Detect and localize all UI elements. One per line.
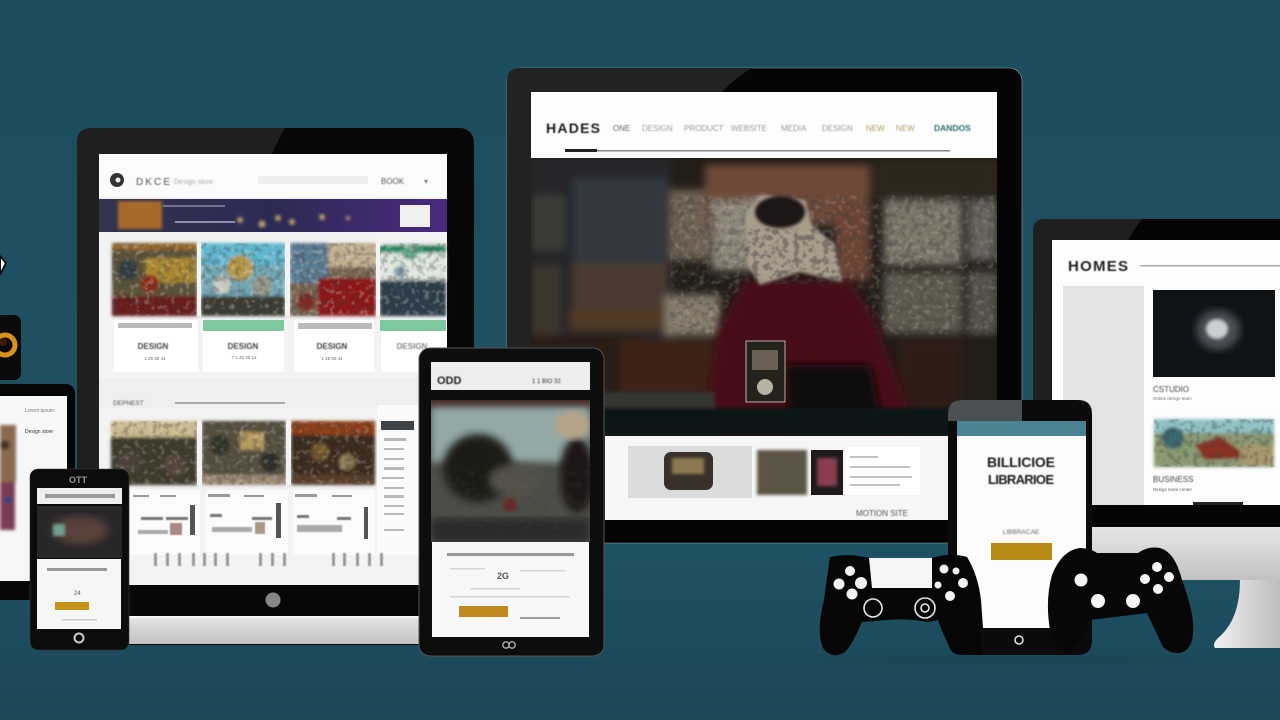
right phone heading: LIBRARIOE <box>988 472 1054 487</box>
far-left tablet text: Lorem ipsum <box>25 408 54 414</box>
left tablet header: ▾ <box>424 177 428 186</box>
left tablet cards row 1: DESIGN <box>397 342 428 351</box>
controller sticks <box>864 598 935 618</box>
centre tablet header: ODD <box>437 375 462 387</box>
left tablet sidebar <box>377 405 447 555</box>
right phone heading <box>987 454 1055 487</box>
centre tablet painting <box>431 390 594 542</box>
monitor header: NEW <box>896 124 915 133</box>
monitor bottom strip: MOTION SITE <box>856 509 908 518</box>
monitor header: DESIGN <box>822 124 853 133</box>
left tablet cards row 1 <box>114 320 447 372</box>
icon: small white tag <box>0 256 6 275</box>
device: small phone <box>30 469 129 650</box>
left tablet cards row 1: 7 1 20 40 12 <box>231 355 257 360</box>
left tablet cards row 1: DESIGN <box>317 342 348 351</box>
small phone header <box>37 488 122 504</box>
left tablet cards row 1: 1 25 80 44 <box>321 356 343 361</box>
device: centre monitor <box>507 68 1022 543</box>
left tablet screen <box>99 154 447 585</box>
left tablet header: BOOK <box>381 177 405 186</box>
icon: orange app tile <box>0 315 21 380</box>
right monitor caption 1 <box>1153 385 1192 401</box>
centre tablet home button <box>503 642 515 648</box>
left tablet home button <box>266 592 280 608</box>
left tablet cards row 1: DESIGN <box>138 342 169 351</box>
left tablet picture row 1 <box>112 243 446 316</box>
monitor header <box>531 92 997 158</box>
left tablet header: DKCE <box>136 177 170 188</box>
controller buttons <box>1074 562 1174 608</box>
monitor small product card <box>746 341 785 402</box>
right phone caption: LIBBRACAE <box>1003 529 1040 536</box>
small phone form: 24 <box>74 591 81 597</box>
right monitor caption 1: CSTUDIO <box>1153 385 1189 394</box>
controller buttons right <box>934 564 968 601</box>
left tablet cards row 1: DESIGN <box>228 342 259 351</box>
monitor header: WEBSITE <box>731 124 767 133</box>
right monitor caption 1: Online design team <box>1153 396 1192 401</box>
icon: left game controller <box>820 555 983 655</box>
monitor header: HADES <box>546 120 600 136</box>
monitor header: NEW <box>866 124 885 133</box>
device: far-left tablet: Design store <box>25 429 53 435</box>
left tablet cards row 1: 1 25 80 44 <box>144 356 166 361</box>
right monitor screen <box>1052 240 1280 505</box>
phone lower bezel <box>981 628 1051 655</box>
monitor header: DANDOS <box>934 123 971 133</box>
monitor header: DESIGN <box>642 124 673 133</box>
centre tablet header: 1 1 BIO 32 <box>532 379 561 385</box>
icon: right game controller <box>1048 548 1193 653</box>
right phone heading: BILLICIOE <box>987 454 1055 470</box>
right monitor dark picture <box>1153 290 1275 377</box>
right phone gold button <box>991 543 1052 560</box>
left tablet footer digits <box>154 553 383 566</box>
right monitor caption 2 <box>1153 475 1243 505</box>
right monitor stand <box>1092 527 1280 648</box>
monitor bottom strip <box>605 436 997 520</box>
centre tablet form <box>432 542 589 637</box>
small phone picture <box>37 506 122 558</box>
far-left tablet screen <box>0 396 67 581</box>
controller buttons left <box>834 566 867 600</box>
right phone teal bar <box>957 421 1086 436</box>
right monitor title: HOMES <box>1068 258 1128 275</box>
left tablet picture row 2 <box>111 421 375 485</box>
device: small phone: OTT <box>69 475 87 485</box>
far-left tablet picture <box>0 425 16 530</box>
icon: phone home glyph <box>1015 636 1023 644</box>
monitor header: ONE <box>613 124 630 133</box>
right monitor caption 2: BUSINESS <box>1153 475 1193 484</box>
monitor hero picture <box>531 158 997 436</box>
left tablet section label <box>99 378 447 408</box>
device: far-left tablet <box>0 384 75 600</box>
left tablet cards row 2 <box>130 490 375 555</box>
right monitor caption 2: Design team center <box>1153 487 1193 492</box>
centre tablet header <box>431 362 590 390</box>
small phone form <box>37 559 121 629</box>
centre tablet form: 2G <box>497 571 509 581</box>
device: right monitor <box>1033 219 1280 648</box>
monitor header: PRODUCT <box>684 124 724 133</box>
controller touchpad <box>869 558 932 588</box>
right monitor grey sidebar <box>1063 286 1144 505</box>
left tablet section label: DEPNEST <box>113 400 144 407</box>
left tablet header: Design store <box>174 179 213 186</box>
right monitor landscape picture <box>1154 419 1274 467</box>
device: centre tablet <box>419 348 604 656</box>
shadow under devices <box>820 656 1200 664</box>
left tablet header <box>99 154 447 197</box>
small phone home button <box>74 634 84 642</box>
left tablet purple banner <box>99 199 447 232</box>
device: right phone <box>948 400 1092 655</box>
right phone screen <box>957 436 1086 628</box>
monitor header: MEDIA <box>781 124 807 133</box>
device: large left tablet <box>77 128 474 645</box>
left tablet silver base <box>128 616 420 644</box>
